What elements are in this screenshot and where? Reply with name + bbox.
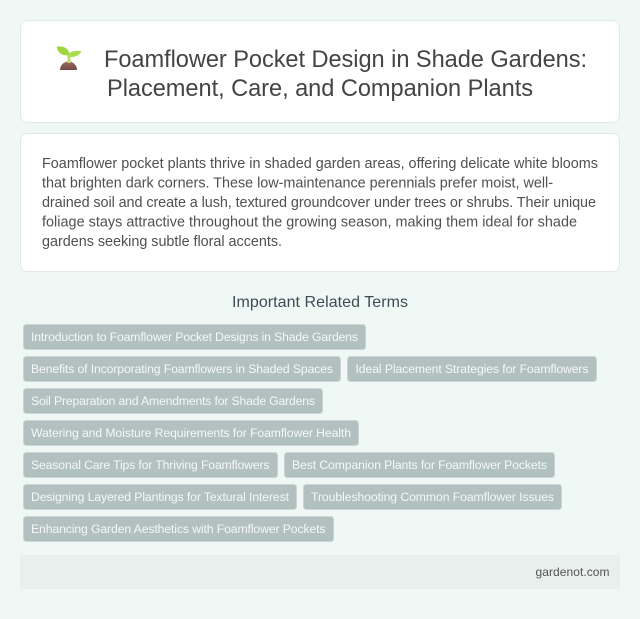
tag: soil: Soil Preparation and Amendments for Shade Gardens (31, 394, 315, 408)
tag: soil (24, 388, 322, 414)
tag: benefits: Benefits of Incorporating Foamflowers in Shaded Spaces (31, 362, 333, 376)
text block: introduction paragraph: foliage stays attractive throughout the growing season, making them ideal for shade (42, 214, 577, 230)
icon: sprout (56, 46, 82, 70)
tag: placement: Ideal Placement Strategies for Foamflowers (356, 362, 588, 376)
tag: introduction (24, 324, 366, 350)
tag: benefits (24, 356, 340, 382)
tag: troubleshooting: Troubleshooting Common Foamflower Issues (311, 490, 554, 504)
tag: layered plantings: Designing Layered Plantings for Textural Interest (31, 490, 290, 504)
tag: layered plantings (24, 484, 296, 510)
tag: watering: Watering and Moisture Requirements for Foamflower Health (31, 426, 351, 440)
text block: introduction paragraph (42, 156, 598, 250)
heading: related terms: Important Related Terms (232, 294, 408, 311)
title (104, 47, 587, 102)
text block: introduction paragraph: Foamflower pocket plants thrive in shaded garden areas, offering delicate white blooms (42, 156, 598, 172)
tag: companion plants (284, 452, 554, 478)
text block: introduction paragraph: that brighten dark corners. These low-maintenance perennials prefer moist, well- (42, 176, 553, 192)
tag: seasonal care: Seasonal Care Tips for Thriving Foamflowers (31, 458, 270, 472)
title: Placement, Care, and Companion Plants (107, 76, 533, 102)
tag: introduction: Introduction to Foamflower Pocket Designs in Shade Gardens (31, 330, 358, 344)
tag: companion plants: Best Companion Plants for Foamflower Pockets (292, 458, 547, 472)
footer: source text: gardenot.com (536, 565, 610, 579)
tag: seasonal care (24, 452, 278, 478)
text block: introduction paragraph: gardens seeking subtle floral accents. (42, 234, 282, 250)
panel: related term tags (24, 324, 596, 542)
tag: aesthetics: Enhancing Garden Aesthetics with Foamflower Pockets (31, 522, 326, 536)
tag: aesthetics (24, 516, 334, 542)
text block: introduction paragraph: drained soil and create a lush, textured groundcover under trees or shrubs. Their unique (42, 195, 596, 211)
tag: troubleshooting (304, 484, 562, 510)
footer (20, 555, 620, 589)
panel: header (20, 20, 620, 122)
panel: introduction (20, 134, 620, 272)
tag: watering (24, 420, 358, 446)
title: Foamflower Pocket Design in Shade Gardens: (104, 47, 587, 73)
tag: placement (348, 356, 596, 382)
